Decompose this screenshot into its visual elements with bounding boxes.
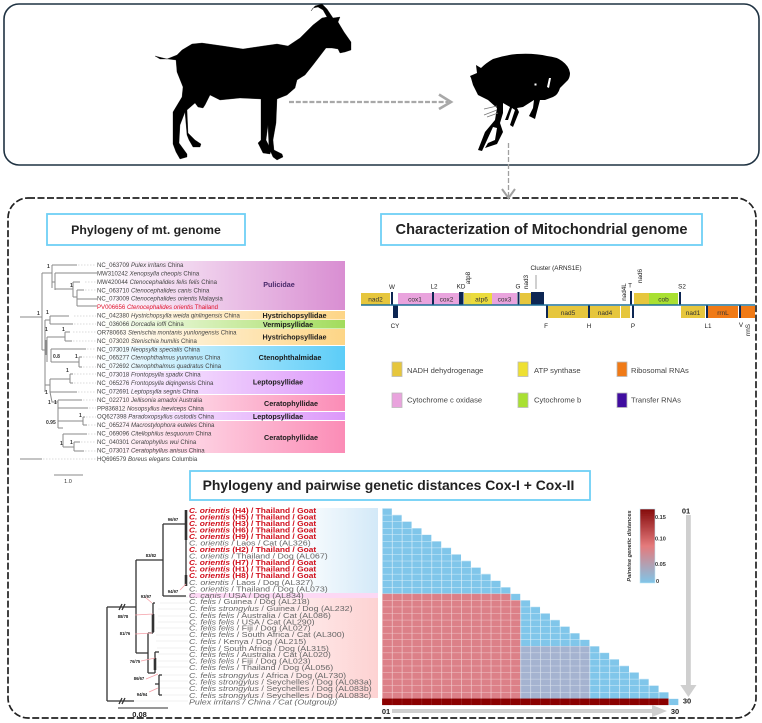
taxa labels: C. orientis (H2) / Thailand / Goat [189,546,317,554]
support labels: 83/82 [146,553,157,558]
species labels: NC_063710 Ctenocephalides canis China [97,288,210,294]
vertical axis arrow [680,506,696,706]
taxa labels: C. orientis (H8) / Thailand / Goat [189,572,317,580]
chart: mitochondrial gene map [361,265,755,408]
support labels: 76/75 [130,659,141,664]
tRNA and rotated labels: W [389,284,395,291]
taxa labels: C. felis felis / Thailand / Dog (AL056) [189,664,333,672]
taxa labels: C. orientis / Thailand / Dog (AL067) [189,552,328,560]
taxa labels: C. orientis (H6) / Thailand / Goat [189,526,317,534]
species labels: NC_042380 Hystrichopsylla weida qinlingensis China [97,314,241,320]
heading: phylogeny and pairwise genetic distances [190,471,590,500]
taxa labels: C. felis felis / South Africa / Cat (AL300) [189,631,345,639]
species labels: NC_040301 Ceratophyllus wui China [97,440,197,446]
support labels: 94/97 [168,589,179,594]
family labels: Ctenophthalmidae [259,353,321,362]
bootstrap labels: 1 [62,327,65,333]
scale bar label: 1.0 [64,479,72,485]
family labels: Ceratophyllidae [264,433,318,442]
support labels: 93/97 [141,594,152,599]
species labels: NC_065277 Ctenophthalmus yunnanus China [97,356,221,362]
tRNA and rotated labels: nad3 [523,275,530,289]
heatmap cells [382,508,678,705]
tRNA and rotated labels: KD [457,284,466,290]
tRNA and rotated labels: atp8 [465,271,472,284]
species labels: NC_065276 Frontopsylla diqingensis China [97,381,214,387]
bootstrap labels: 1 [45,390,48,396]
tRNA and rotated labels: L2 [430,284,438,290]
bootstrap labels: 0.8 [53,354,60,360]
branch breaks [119,604,125,704]
legend: Transfer RNAs [631,396,681,404]
scale bar [118,708,168,719]
genes above strand [361,293,678,304]
heading: phylogeny of mt genome [47,214,245,245]
tRNA and rotated labels: F [544,323,548,330]
taxa labels: C. orientis / Laos / Cat (AL326) [189,539,311,547]
family labels: Leptopsyllidae [253,378,303,386]
bootstrap labels: 1 [45,327,48,333]
bootstrap labels: 1 [79,413,82,419]
taxa labels: C. felis strongylus / Africa / Dog (AL730) [189,672,346,680]
taxa labels: C. canis / USA / Dog (AL834) [189,592,304,600]
heading: phylogeny and pairwise genetic distances: Phylogeny and pairwise genetic distances Cox-I + Cox-II [203,477,574,493]
taxa labels: C. felis felis / Australia / Cat (AL086) [189,612,331,620]
leader lines [134,597,188,701]
bootstrap labels: 1 [37,311,40,317]
taxa labels: C. felis strongylus / Seychelles / Dog (AL083c) [189,692,372,700]
tRNA and rotated labels: L1 [704,323,712,330]
family labels [253,280,326,442]
tRNA and rotated labels: rrnS [745,324,752,336]
gene names: cob [658,296,669,304]
gene names: cox1 [408,296,422,304]
genes below strand [548,306,755,318]
tree branches [107,510,186,701]
bootstrap labels: 1 [48,400,51,406]
chart: mitogenome phylogeny [20,261,345,485]
colour bar legend: 0.05 [655,562,666,568]
icon: flea silhouette [470,54,570,151]
support labels: 88/78 [118,614,129,619]
leader lines [43,265,96,459]
tRNA and rotated labels: S2 [678,284,686,290]
taxa labels: C. felis felis / Australia / Cat (AL020) [189,651,331,659]
tRNA and rotated labels: Cluster (ARNS1E) [530,265,582,272]
support labels: 96/97 [168,517,179,522]
tRNA and rotated labels: nad4L [621,283,628,301]
vertical axis arrow: 30 [683,696,691,706]
arrow: flea to analysis [502,143,515,198]
taxa labels: C. orientis (H4) / Thailand / Goat [189,507,317,515]
support labels: 94/94 [137,692,148,697]
bootstrap labels [37,264,82,447]
gene names: atp6 [475,296,488,304]
legend: ATP synthase [534,366,581,375]
taxa labels: C. felis / Guinea / Dog (AL218) [189,598,310,606]
species labels: NC_073018 Frontopsylla spadix China [97,373,201,379]
taxa labels: Pulex irritans / China / Cat (Outgroup) [189,698,338,706]
species labels: NC_022710 Jellisonia amadoi Australia [97,398,203,404]
tRNA and rotated labels: H [587,323,592,330]
colour bar legend [627,509,666,585]
horizontal axis arrow: 30 [671,707,679,716]
species labels: MW420044 Ctenocephalides felis felis China [97,280,218,286]
taxa labels: C. orientis (H7) / Thailand / Goat [189,559,317,567]
species labels: NC_073019 Neopsylla specialis China [97,347,201,353]
colour bar legend: 0 [656,579,659,585]
family labels: Pulicidae [263,280,295,289]
tRNA and rotated labels: T [628,282,632,290]
panel: analysis results [8,198,756,718]
transfer RNAs [391,291,741,318]
species labels: PV006656 Ctenocephalides orientis Thailand [97,305,218,311]
panel: host and vector [4,4,759,165]
tRNA and rotated labels: CY [391,323,400,330]
gene names: nad2 [368,296,383,304]
tRNA and rotated labels: nad6 [637,269,644,283]
species labels: NC_072692 Ctenophthalmus quadratus China [97,364,222,370]
heading: phylogeny of mt genome: Phylogeny of mt. genome [71,223,221,237]
chart: pairwise distance heatmap [382,506,696,717]
gene names: nad4 [598,310,613,317]
tRNA and rotated labels: G [516,284,521,290]
vertical axis arrow: 01 [682,506,690,516]
species labels: NC_073020 Stenischia humilis China [97,339,197,345]
species labels: NC_069096 Citellophilus tesquorum China [97,432,212,438]
taxa labels: C. felis strongylus / Guinea / Dog (AL232) [189,605,353,613]
taxa labels: C. felis felis / Fiji / Dog (AL023) [189,657,311,665]
tRNA and rotated labels: V [739,322,744,329]
family labels: Hystrichopsyllidae [263,311,326,320]
tRNA and rotated labels [389,265,752,336]
bootstrap labels: 0.95 [46,420,56,426]
colour bar legend: 0.15 [655,515,666,521]
bootstrap labels: 1 [60,441,63,447]
bootstrap labels: 1 [47,264,50,270]
legend: NADH dehydrogenage [407,366,483,375]
bootstrap labels: 1 [66,368,69,374]
species labels: NC_036066 Dorcadia ioffi China [97,322,184,328]
species labels: OR780663 Stenischia montanis yunlongensis China [97,330,237,336]
tree branches [20,265,97,475]
species labels: OQ627398 Paradoxopsyllus custodis China [97,415,215,421]
strand line [361,304,755,306]
species labels [97,263,241,463]
taxa labels: C. orientis / Thailand / Dog (AL073) [189,585,328,593]
gene names: cox3 [498,296,512,304]
species labels: HQ696579 Boreus elegans Columbia [97,457,198,463]
gene names: nad1 [686,310,701,317]
gene names: nad5 [561,310,576,317]
horizontal axis arrow: 01 [382,707,390,716]
taxa labels: C. orientis (H3) / Thailand / Goat [189,520,317,528]
taxa labels: C. felis strongylus / Seychelles / Dog (AL083a) [189,678,372,686]
bootstrap labels: 1 [54,400,57,406]
colour bar legend: Pairwise genetic distances [627,510,633,582]
taxa labels: C. felis felis / Fiji / Dog (AL027) [189,624,311,632]
taxa labels [189,507,372,706]
species labels: NC_073009 Ctenocephalides orientis Malaysia [97,297,223,303]
heading: characterization of mitochondrial genome [381,214,702,245]
legend: Ribosomal RNAs [631,366,689,375]
species labels: PP836812 Nosopsyllus laeviceps China [97,406,205,412]
arrow: goat to flea [289,94,451,109]
taxa labels: C. felis / Kenya / Dog (AL215) [189,638,307,646]
species labels: MW310242 Xenopsylla cheopis China [97,271,200,277]
support labels [118,517,179,697]
chart: cox phylogeny [107,507,378,719]
species labels: NC_065274 Macrostylophora euteles China [97,423,215,429]
species labels: NC_073017 Ceratophyllus anisus China [97,448,205,454]
pink support connectors [135,584,186,692]
taxa labels: C. felis felis / USA / Cat (AL290) [189,618,315,626]
gene names: cox2 [440,296,454,304]
gene names [368,296,729,317]
support labels: 81/76 [120,631,131,636]
family bands [97,261,345,453]
taxa labels: C. orientis (H5) / Thailand / Goat [189,513,317,521]
family labels: Vermipsyllidae [263,320,313,329]
bootstrap labels: 1 [70,440,73,446]
legend [392,362,689,408]
taxa labels: C. orientis (H9) / Thailand / Goat [189,533,317,541]
gene names: rrnL [717,310,729,317]
legend: Cytochrome c oxidase [407,396,482,404]
clade backgrounds [189,508,378,698]
taxa labels: C. orientis / Laos / Dog (AL327) [189,579,313,587]
taxa labels: C. felis / South Africa / Dog (AL315) [189,645,329,653]
scale bar: 0.08 [132,710,147,719]
bootstrap labels: 1 [46,310,49,316]
tRNA and rotated labels: P [631,323,635,330]
legend: Cytochrome b [534,396,581,404]
horizontal axis arrow [382,705,679,717]
bootstrap labels: 1 [70,283,73,289]
taxa labels: C. orientis (H1) / Thailand / Goat [189,565,317,573]
species labels: NC_072691 Leptopsylla segnis China [97,390,199,396]
species labels: NC_063709 Pulex irritans China [97,263,184,269]
colour bar legend: 0.10 [655,536,666,542]
family labels: Hystrichopsyllidae [263,332,326,342]
family labels: Ceratophyllidae [264,399,318,408]
taxa labels: C. felis strongylus / Seychelles / Dog (AL083b) [189,685,372,693]
icon: goat silhouette [155,4,351,160]
heading: characterization of mitochondrial genome: Characterization of Mitochondrial genome [396,222,687,238]
support labels: 86/67 [134,676,145,681]
bootstrap labels: 1 [75,354,78,360]
family labels: Leptopsyllidae [253,412,303,421]
